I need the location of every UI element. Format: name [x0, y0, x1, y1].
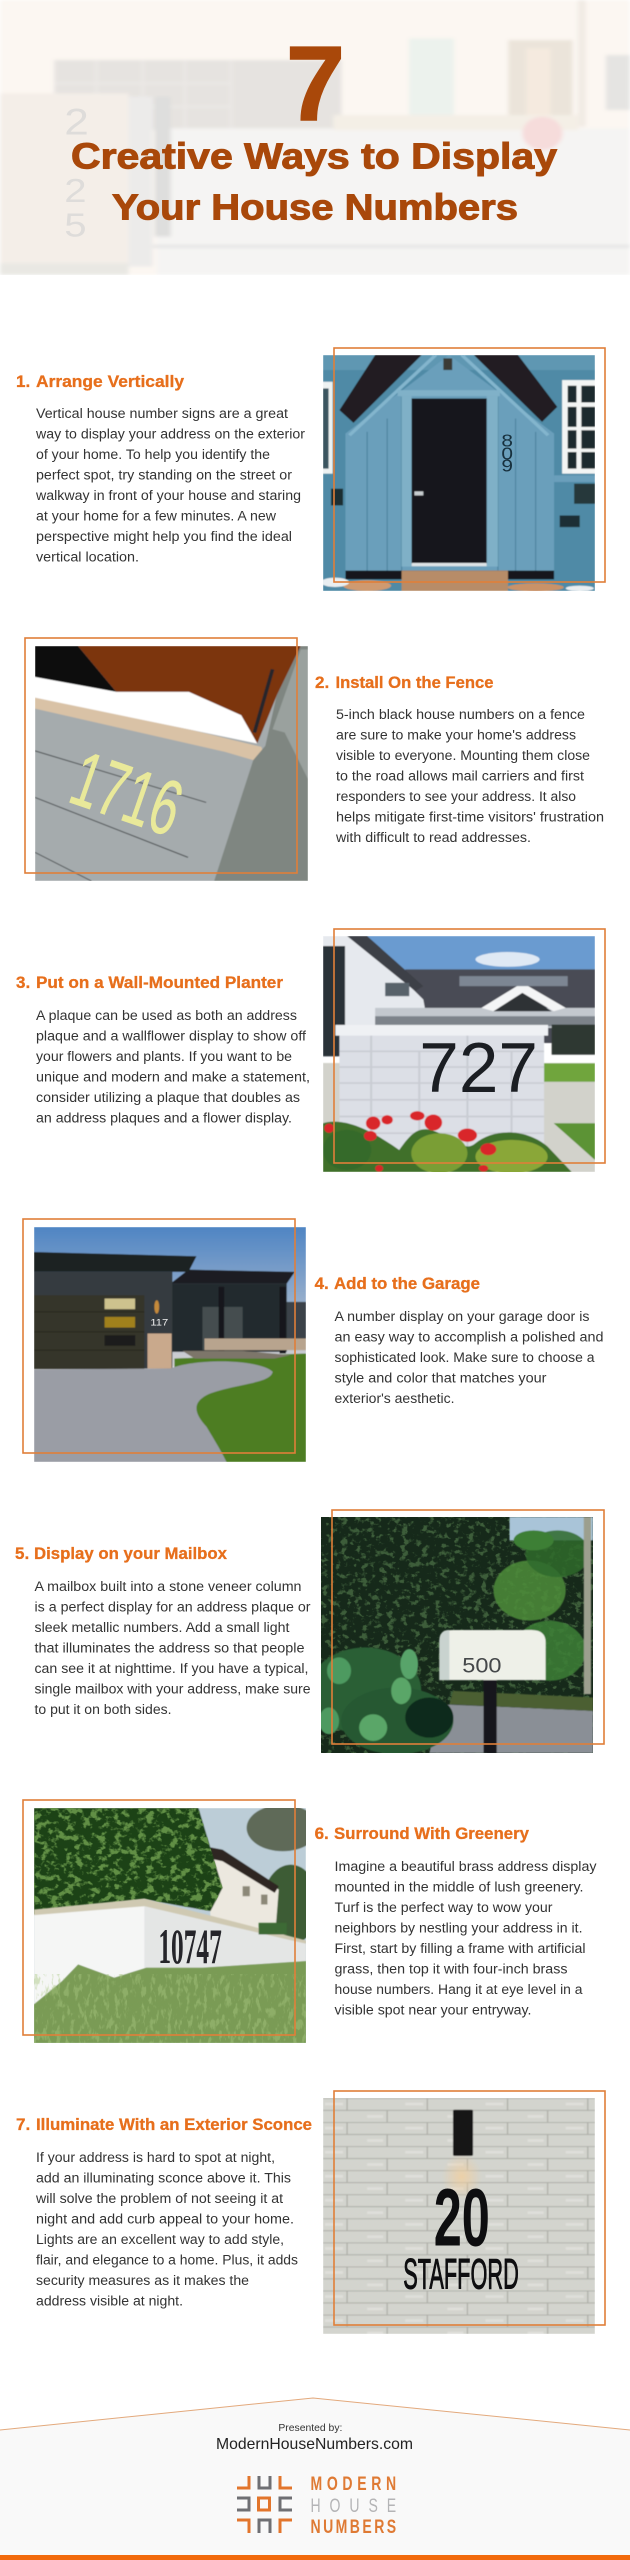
text block 2: helps mitigate first-time visitors' frustration: [336, 810, 604, 824]
title: Creative Ways to Display: [71, 136, 557, 176]
heading 6: Surround With Greenery: [334, 1824, 530, 1843]
panel: 3 wall-mounted planter: [16, 929, 605, 1173]
header background photo: 2: [64, 101, 89, 143]
text block 6: neighbors by nestling your address in it.: [334, 1920, 582, 1936]
text block 1: walkway in front of your house and staring: [35, 488, 301, 503]
text block 4: A number display on your garage door is: [334, 1309, 590, 1324]
text block 5: is a perfect display for an address plaque or: [34, 1600, 311, 1614]
text block 1: perspective might help you find the ideal: [36, 529, 292, 544]
photo: blue house door with 809: 0: [501, 445, 513, 464]
heading 1: 1.: [16, 372, 30, 391]
logo wordmark: [310, 2473, 396, 2538]
photo frame 5: [332, 1510, 604, 1744]
text block 1: perfect spot, try standing on the street or: [36, 468, 293, 482]
text block 7: night and add curb appeal to your home.: [36, 2212, 294, 2226]
photo: blue house door with 809: 8: [501, 432, 513, 451]
photo: blue house door with 809: 9: [501, 457, 513, 476]
text block 4: an easy way to accomplish a polished and: [334, 1330, 604, 1344]
text block 5: sleek metallic numbers. Add a small light: [34, 1620, 290, 1635]
title: [71, 136, 557, 228]
text block 5: can see it at nighttime. If you have a typical,: [34, 1661, 308, 1676]
panel: 2 install on the fence: [25, 638, 604, 881]
text block 7: will solve the problem of not seeing it at: [35, 2191, 283, 2206]
heading 3: 3.: [16, 973, 30, 992]
logo wordmark: HOUSE: [310, 2495, 396, 2517]
photo: garage with 117: 117: [150, 1318, 169, 1328]
text block 3: your flowers and plants. If you want to be: [36, 1049, 292, 1064]
panel: 7 illuminate with an exterior sconce: [16, 2091, 605, 2334]
photo frame 1: [334, 348, 605, 582]
text block 7: Lights are an excellent way to add style,: [36, 2232, 284, 2247]
heading 4: 4.: [315, 1274, 329, 1293]
heading 7: 7.: [16, 2115, 30, 2134]
header background photo: [0, 0, 630, 275]
heading 3: Put on a Wall-Mounted Planter: [36, 973, 283, 992]
photo: brick wall with 20 Stafford and sconce: [323, 2098, 595, 2334]
text block 3: plaque and a wallflower display to show off: [36, 1028, 306, 1044]
heading 2: 2.: [315, 673, 329, 692]
heading 5: 5.: [15, 1544, 29, 1563]
footer roof shape: [0, 2398, 630, 2560]
text block 7: flair, and elegance to a home. Plus, it adds: [36, 2252, 298, 2268]
text block 6: mounted in the middle of lush greenery.: [334, 1880, 584, 1894]
text block 2: visible to everyone. Mounting them close: [336, 748, 590, 763]
heading 7: Illuminate With an Exterior Sconce: [36, 2115, 312, 2134]
text block 7: add an illuminating sconce above it. This: [36, 2170, 291, 2186]
roof line: [0, 2398, 630, 2430]
heading 5: Display on your Mailbox: [34, 1544, 228, 1563]
photo: brick wall with 20 Stafford and sconce: 20: [434, 2172, 490, 2264]
text block 7: security measures as it makes the: [36, 2273, 249, 2288]
text block 1: [35, 406, 306, 564]
text block 5: single mailbox with your address, make sure: [34, 1682, 310, 1696]
heading 2: Install On the Fence: [336, 673, 494, 692]
text block 4: exterior's aesthetic.: [334, 1391, 454, 1406]
text block 4: [334, 1309, 604, 1406]
text block 2: with difficult to read addresses.: [335, 830, 531, 845]
photo frame 4: [23, 1219, 295, 1453]
photo: mailbox with 500: 500: [462, 1654, 502, 1678]
website: ModernHouseNumbers.com: [216, 2436, 413, 2453]
header background photo: 5: [64, 207, 87, 244]
text block 5: [34, 1579, 311, 1717]
heading 6: 6.: [315, 1824, 329, 1843]
text block 6: visible spot near your entryway.: [334, 2002, 532, 2018]
bottom orange band: [0, 2555, 630, 2560]
panel: 6 surround with greenery: [23, 1800, 597, 2043]
text block 1: Vertical house number signs are a great: [36, 406, 288, 421]
photo frame 7: [334, 2091, 605, 2325]
text block 3: consider utilizing a plaque that doubles as: [36, 1090, 300, 1105]
text block 6: Turf is the perfect way to wow your: [334, 1900, 553, 1915]
text block 6: [334, 1859, 597, 2018]
text block 1: way to display your address on the exterior: [35, 426, 306, 442]
panel: 1 arrange vertically: [16, 348, 605, 591]
text block 2: 5-inch black house numbers on a fence: [336, 707, 585, 722]
text block 6: Imagine a beautiful brass address display: [334, 1859, 597, 1874]
photo: white brick planter with 727: 727: [419, 1027, 538, 1107]
text block 4: style and color that matches your: [334, 1370, 547, 1386]
header: faded house photo with title: [0, 0, 630, 275]
photo frame 6: [23, 1800, 295, 2035]
heading 1: Arrange Vertically: [36, 372, 185, 391]
logo wordmark: NUMBERS: [310, 2516, 396, 2538]
logo wordmark: MODERN: [310, 2473, 396, 2495]
presented by: Presented by:: [278, 2422, 342, 2434]
house number 1716: 1716: [60, 734, 193, 853]
text block 5: A mailbox built into a stone veneer column: [34, 1579, 302, 1594]
photo: white wall with 10747 and greenery: 10747: [158, 1919, 222, 1974]
text block 2: to the road allows mail carriers and first: [336, 768, 584, 784]
text block 1: at your home for a few minutes. A new: [36, 508, 276, 524]
text block 7: address visible at night.: [36, 2294, 183, 2308]
footer: [0, 2398, 630, 2560]
text block 6: First, start by filling a frame with artificial: [334, 1941, 586, 1956]
photo frame 2: [25, 638, 297, 873]
text block 3: unique and modern and make a statement,: [36, 1070, 310, 1084]
text block 1: of your home. To help you identify the: [36, 447, 270, 462]
panel: 4 add to the garage: [23, 1219, 604, 1462]
photo: white brick planter with 727: [323, 936, 595, 1172]
panel: 5 display on your mailbox: [15, 1510, 604, 1754]
text block 7: If your address is hard to spot at night,: [36, 2150, 275, 2165]
photo: white wall with 10747 and greenery: [34, 1808, 306, 2043]
text block 3: [36, 1008, 310, 1126]
photo frame 3: [334, 929, 605, 1163]
header background photo: 2: [64, 172, 87, 209]
text block 6: house numbers. Hang it at eye level in a: [334, 1982, 583, 1997]
text block 2: responders to see your address. It also: [336, 789, 576, 804]
text block 7: [35, 2150, 298, 2308]
icon: logo mark: [237, 2476, 292, 2533]
text block 5: to put it on both sides.: [34, 1702, 172, 1717]
photo: garage with 117: [34, 1227, 306, 1462]
text block 3: an address plaques and a flower display.: [36, 1110, 292, 1126]
text block 2: are sure to make your home's address: [336, 728, 576, 742]
photo: mailbox with 500: [321, 1517, 593, 1753]
text block 1: vertical location.: [36, 550, 139, 564]
text block 3: A plaque can be used as both an address: [36, 1008, 297, 1023]
photo: blue house door with 809: [323, 355, 595, 591]
title: Your House Numbers: [112, 186, 518, 228]
text block 5: that illuminates the address so that people: [34, 1640, 304, 1656]
text block 2: [335, 707, 604, 845]
text block 4: sophisticated look. Make sure to choose a: [334, 1350, 595, 1365]
number 7: 7: [286, 25, 345, 143]
heading 4: Add to the Garage: [334, 1274, 480, 1293]
photo: fence with 1716: [35, 646, 308, 881]
text block 6: grass, then top it with four-inch brass: [334, 1962, 568, 1976]
